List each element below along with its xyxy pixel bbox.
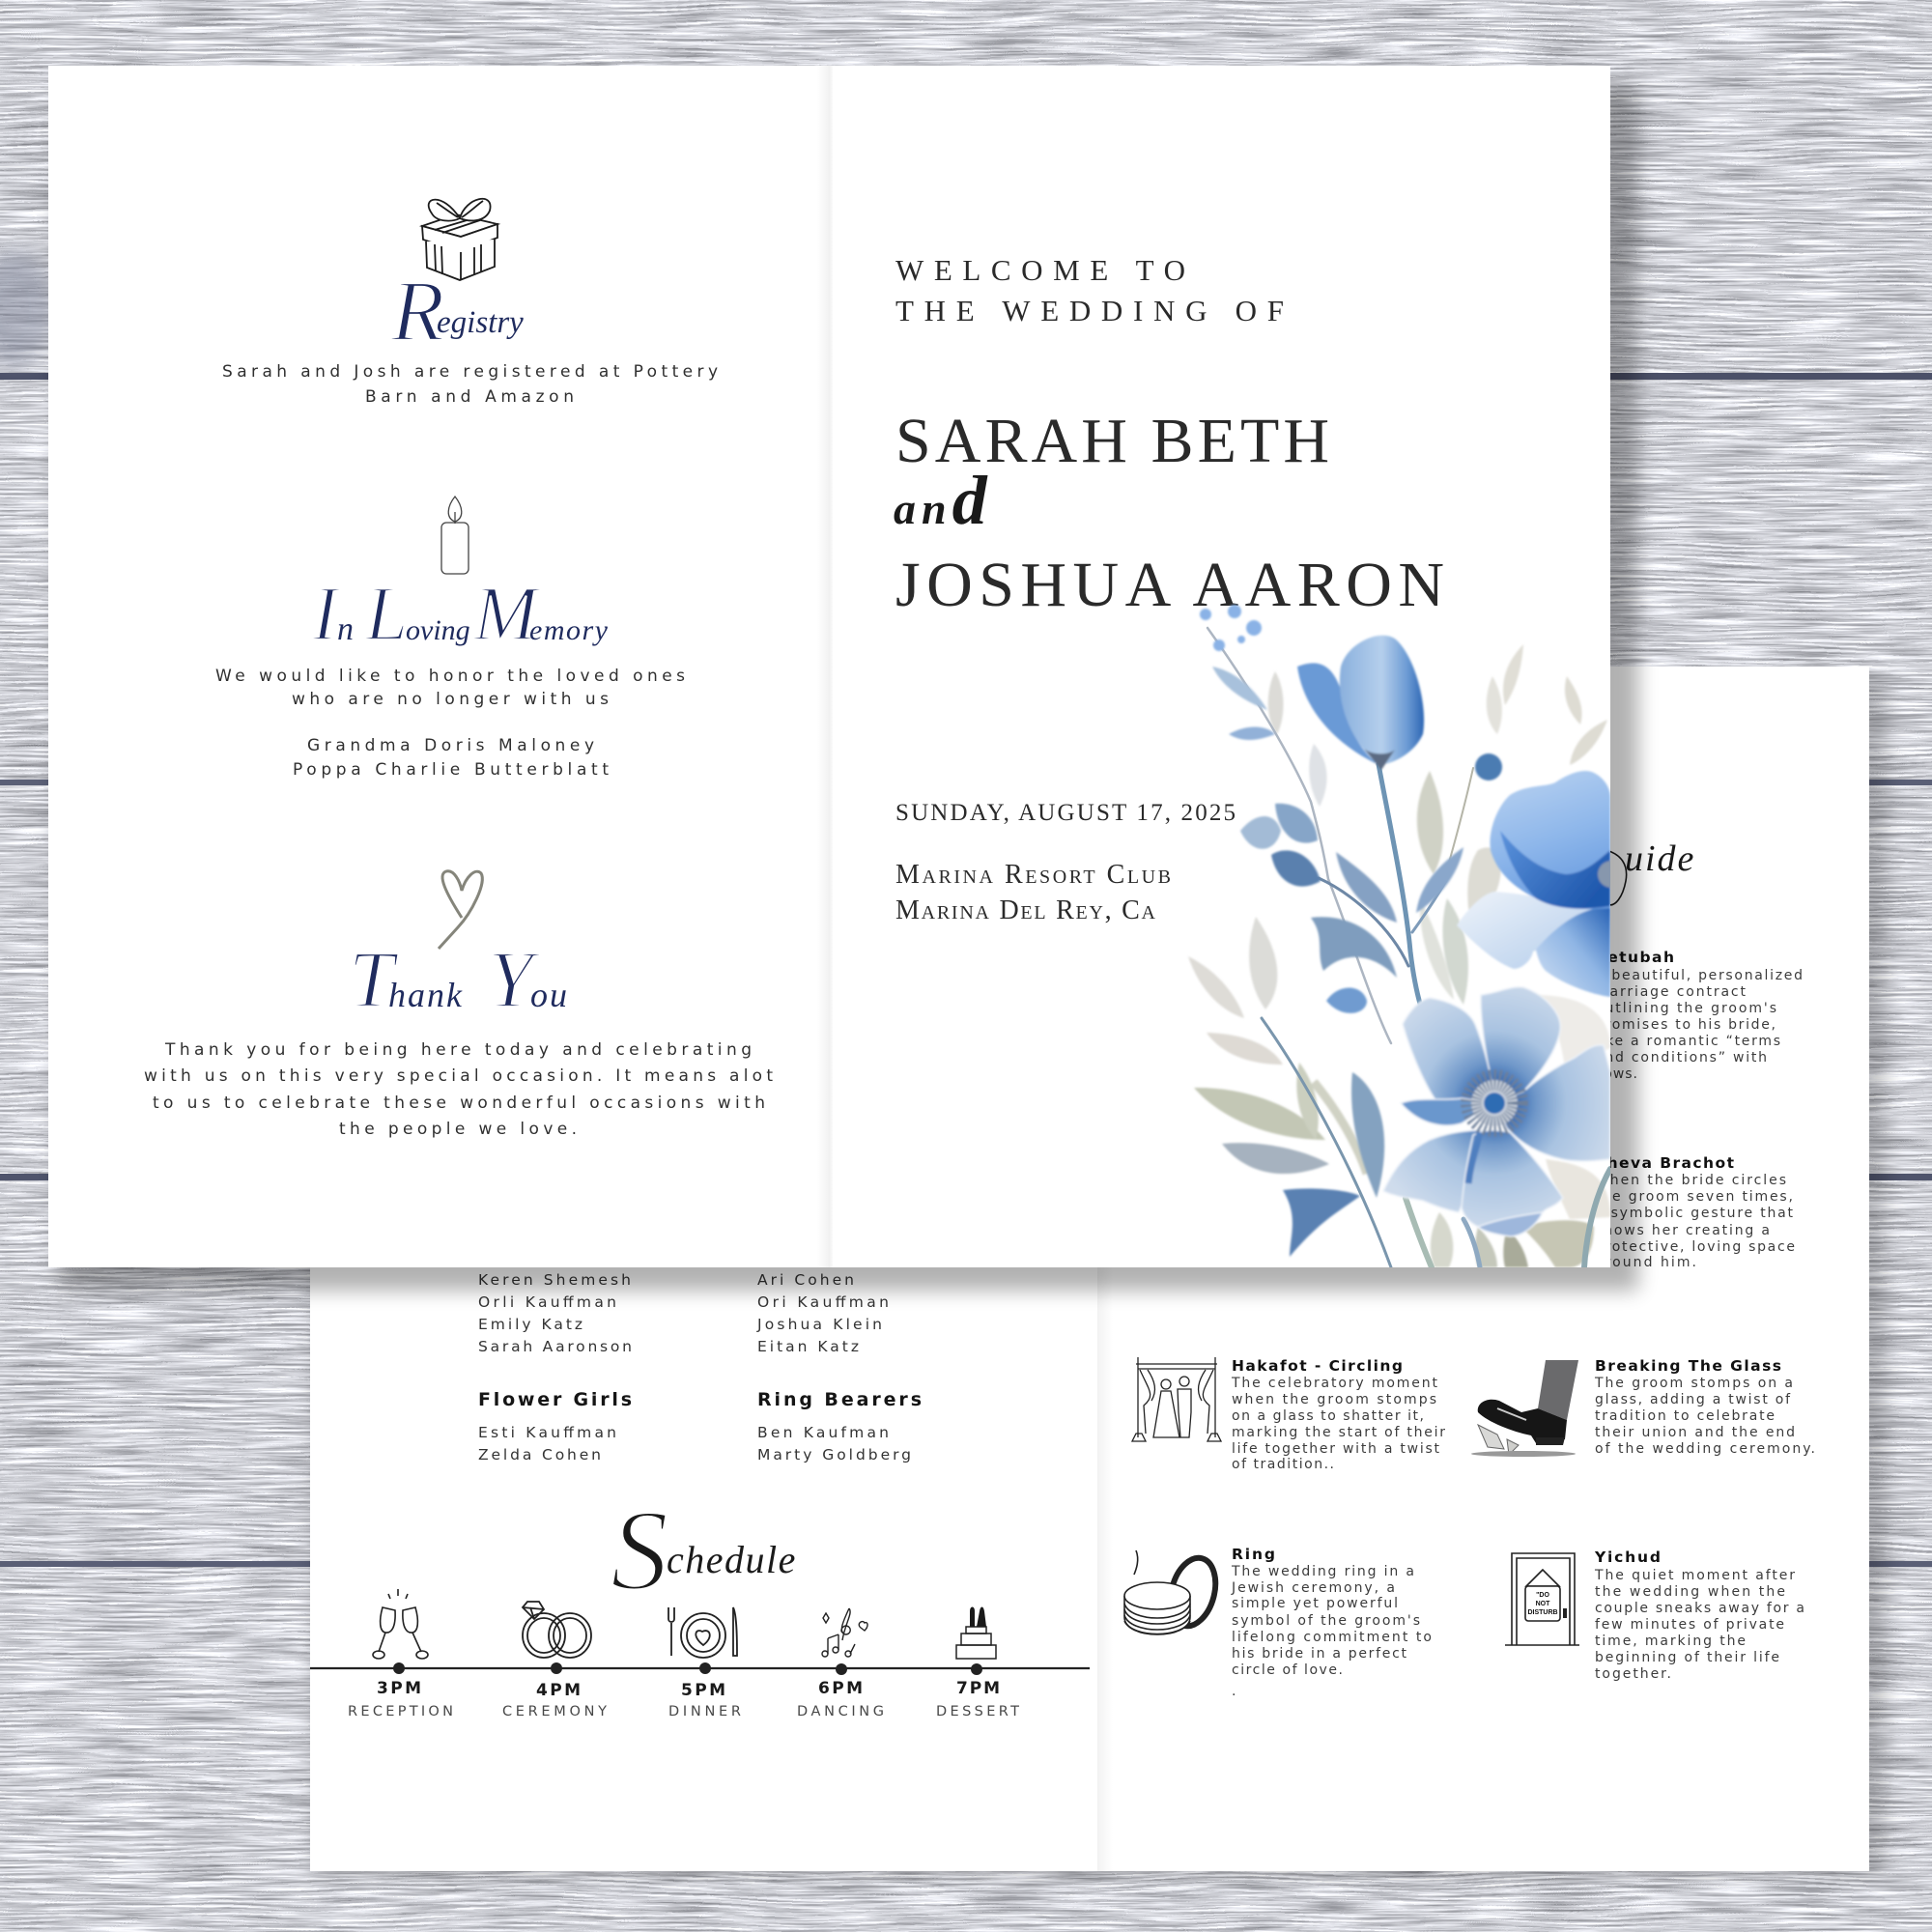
right flower, clipped by page edge bbox=[1457, 771, 1625, 997]
registry section: R bbox=[390, 264, 444, 359]
icon: gift box bbox=[422, 199, 497, 280]
icon: music notes bbox=[822, 1608, 867, 1657]
in loving memory section: We would like to honor the loved ones bbox=[215, 667, 685, 686]
icon: door with sign: DISTURB bbox=[1527, 1609, 1558, 1616]
guide item: ketubah: outlining the groom's bbox=[1595, 1001, 1776, 1016]
in loving memory section bbox=[215, 497, 685, 780]
icon: chuppah couple bbox=[1132, 1357, 1221, 1441]
flower girls: Zelda Cohen bbox=[478, 1446, 601, 1463]
in loving memory section: M bbox=[472, 572, 542, 657]
icon: door with sign: NOT bbox=[1536, 1601, 1550, 1607]
guide item: yichud: beginning of their life bbox=[1595, 1650, 1779, 1665]
schedule timeline bbox=[310, 1589, 1090, 1719]
guide item: sheva brachot: When the bride circles bbox=[1595, 1173, 1786, 1188]
guide item: ring: his bride in a perfect bbox=[1232, 1646, 1406, 1662]
7PM dessert bbox=[936, 1679, 1019, 1719]
guide item: ring: . bbox=[1232, 1684, 1236, 1699]
6PM dancing: DANCING bbox=[797, 1704, 884, 1719]
bridal party names: bridesmaids: Orli Kauffman bbox=[478, 1293, 616, 1311]
icon: heart bbox=[439, 871, 482, 949]
in loving memory section: oving bbox=[406, 614, 470, 646]
bridal party names: bridesmaids: Keren Shemesh bbox=[478, 1271, 631, 1289]
date and venue: Marina Del Rey, Ca bbox=[895, 895, 1156, 925]
thank you section: hank bbox=[388, 976, 464, 1014]
guide item: hakafot: Hakafot - Circling bbox=[1232, 1357, 1403, 1375]
guide item: ketubah: A beautiful, personalized bbox=[1595, 968, 1803, 983]
guide item: breaking the glass: glass, adding a twist of bbox=[1595, 1392, 1791, 1407]
schedule heading: chedule bbox=[667, 1538, 797, 1581]
icon: wedding cake bbox=[956, 1607, 996, 1659]
guide item: ring: symbol of the groom's bbox=[1232, 1613, 1420, 1629]
icon: door with sign bbox=[1505, 1553, 1579, 1645]
guide heading bbox=[1521, 794, 1695, 905]
bridal party names: bridesmaids bbox=[478, 1271, 632, 1355]
icon: candle bbox=[441, 497, 469, 574]
guide item: ring: Jewish ceremony, a bbox=[1231, 1580, 1395, 1596]
5PM dinner: DINNER bbox=[668, 1704, 741, 1719]
guide item: sheva brachot bbox=[1595, 1154, 1795, 1270]
bridal party names: bridesmaids: Emily Katz bbox=[478, 1316, 582, 1333]
4PM ceremony: CEREMONY bbox=[502, 1704, 607, 1719]
5PM dinner: 5PM bbox=[681, 1681, 725, 1700]
guide heading: G bbox=[1521, 794, 1584, 890]
couple names: JOSHUA AARON bbox=[895, 550, 1444, 620]
guide item: sheva brachot: the groom seven times, bbox=[1595, 1189, 1793, 1205]
bridal party names: groomsmen: Eitan Katz bbox=[757, 1338, 859, 1355]
in loving memory section: n bbox=[337, 611, 354, 647]
7PM dessert: 7PM bbox=[956, 1679, 1000, 1698]
guide item: ring: circle of love. bbox=[1232, 1662, 1343, 1678]
guide item: ring bbox=[1124, 1546, 1432, 1699]
3PM reception: 3PM bbox=[377, 1679, 421, 1698]
registry section: Barn and Amazon bbox=[365, 387, 574, 407]
thank you section: ou bbox=[530, 976, 569, 1014]
guide item: breaking the glass: The groom stomps on a bbox=[1594, 1376, 1793, 1391]
guide item: hakafot: life together with a twist bbox=[1232, 1441, 1439, 1457]
tulip flower bbox=[1297, 636, 1424, 770]
blue-gray leaves bbox=[1200, 605, 1502, 1257]
ring bearers: Ben Kaufman bbox=[757, 1424, 889, 1441]
guide item: ring: lifelong commitment to bbox=[1232, 1630, 1432, 1645]
guide item: breaking the glass: of the wedding ceremony. bbox=[1595, 1441, 1815, 1457]
guide item: sheva brachot: around him. bbox=[1595, 1255, 1696, 1270]
guide item: yichud bbox=[1505, 1548, 1804, 1682]
icon: dinner plate bbox=[668, 1607, 737, 1658]
guide item: yichud: few minutes of private bbox=[1595, 1617, 1784, 1633]
4PM ceremony bbox=[502, 1681, 607, 1719]
welcome heading: WELCOME TO bbox=[895, 253, 1185, 287]
thank you section: the people we love. bbox=[339, 1120, 577, 1139]
guide item: ketubah: like a romantic “terms bbox=[1595, 1034, 1780, 1049]
ring bearers: Ring Bearers bbox=[757, 1389, 922, 1410]
guide item: hakafot: The celebratory moment bbox=[1231, 1376, 1437, 1391]
guide item: hakafot: when the groom stomps bbox=[1232, 1392, 1436, 1407]
welcome heading bbox=[895, 253, 1284, 327]
flower girls: Esti Kauffman bbox=[478, 1424, 616, 1441]
ring bearers bbox=[757, 1389, 922, 1463]
in loving memory section: emory bbox=[529, 614, 609, 646]
couple names: and bbox=[894, 462, 988, 539]
bottom flower with stamen center bbox=[1383, 987, 1610, 1236]
panel: front cover spread bbox=[48, 66, 1638, 1291]
couple names: SARAH BETH bbox=[895, 406, 1329, 476]
in loving memory section: Poppa Charlie Butterblatt bbox=[293, 760, 609, 780]
guide item: breaking the glass: Breaking The Glass bbox=[1595, 1357, 1781, 1375]
bridal party names: groomsmen: Ari Cohen bbox=[757, 1271, 854, 1289]
watercolor blue floral bouquet bbox=[1188, 605, 1625, 1267]
guide item: sheva brachot: Sheva Brachot bbox=[1595, 1154, 1735, 1172]
guide item: ketubah: promises to his bride, bbox=[1595, 1017, 1776, 1033]
guide heading: uide bbox=[1625, 838, 1695, 879]
bridal party names: groomsmen: Ori Kauffman bbox=[757, 1293, 889, 1311]
icon: door with sign: "DO bbox=[1536, 1592, 1549, 1599]
3PM reception: RECEPTION bbox=[348, 1704, 453, 1719]
guide item: yichud: together. bbox=[1595, 1666, 1671, 1682]
in loving memory section: I bbox=[311, 572, 341, 657]
guide item: ring: simple yet powerful bbox=[1232, 1596, 1398, 1611]
stems bbox=[1208, 628, 1610, 1267]
guide item: sheva brachot: shows her creating a bbox=[1595, 1223, 1770, 1238]
schedule heading: S bbox=[611, 1486, 668, 1614]
guide item: hakafot: on a glass to shatter it, bbox=[1232, 1408, 1424, 1424]
bridal party names: groomsmen: Joshua Klein bbox=[756, 1316, 882, 1333]
guide item: yichud: The quiet moment after bbox=[1594, 1568, 1795, 1583]
guide item: breaking the glass: tradition to celebrate bbox=[1595, 1408, 1775, 1424]
guide item: ketubah bbox=[1595, 949, 1803, 1082]
7PM dessert: DESSERT bbox=[936, 1704, 1019, 1719]
thank you section: Thank you for being here today and celebrating bbox=[164, 1040, 752, 1060]
bridal party names: groomsmen bbox=[756, 1271, 889, 1355]
thank you section: T bbox=[349, 935, 399, 1025]
ring bearers: Marty Goldberg bbox=[757, 1446, 911, 1463]
thank you section: to us to celebrate these wonderful occasions with bbox=[153, 1094, 765, 1113]
in loving memory section: L bbox=[364, 572, 408, 657]
guide item: hakafot: marking the start of their bbox=[1232, 1425, 1445, 1440]
icon: rings bbox=[1124, 1550, 1223, 1634]
guide item: hakafot: of tradition.. bbox=[1232, 1457, 1334, 1472]
registry section bbox=[222, 199, 718, 407]
date and venue: Marina Resort Club bbox=[895, 860, 1171, 890]
icon: shoe on glass bbox=[1471, 1360, 1578, 1457]
thank you section: with us on this very special occasion. It means alot bbox=[144, 1066, 773, 1086]
couple names bbox=[894, 406, 1444, 620]
flower girls bbox=[478, 1389, 632, 1463]
registry section: Sarah and Josh are registered at Pottery bbox=[222, 362, 718, 382]
guide item: yichud: Yichud bbox=[1594, 1548, 1661, 1566]
guide item: ketubah: Ketubah bbox=[1595, 949, 1674, 966]
5PM dinner bbox=[668, 1681, 741, 1719]
icon: champagne glasses bbox=[373, 1589, 428, 1659]
guide item: breaking the glass: their union and the end bbox=[1595, 1425, 1795, 1440]
guide item: yichud: couple sneaks away for a bbox=[1595, 1601, 1804, 1616]
guide item: hakafot bbox=[1132, 1357, 1445, 1472]
date and venue bbox=[895, 800, 1236, 925]
welcome heading: THE WEDDING OF bbox=[895, 294, 1284, 327]
in loving memory section: who are no longer with us bbox=[292, 690, 609, 709]
bridal party names: bridesmaids: Sarah Aaronson bbox=[478, 1338, 632, 1355]
registry section: egistry bbox=[437, 305, 524, 340]
guide item: breaking the glass bbox=[1471, 1357, 1815, 1457]
6PM dancing: 6PM bbox=[818, 1679, 863, 1698]
panel: back inside spread bbox=[310, 667, 1887, 1876]
thank you section bbox=[144, 871, 773, 1139]
guide item: ketubah: and conditions” with bbox=[1595, 1050, 1767, 1065]
guide item: ring: The wedding ring in a bbox=[1231, 1564, 1414, 1579]
guide item: yichud: the wedding when the bbox=[1595, 1584, 1785, 1600]
3PM reception bbox=[348, 1679, 453, 1719]
thank you section: Y bbox=[488, 935, 541, 1025]
guide item: sheva brachot: protective, loving space bbox=[1595, 1239, 1795, 1255]
date and venue: SUNDAY, AUGUST 17, 2025 bbox=[895, 800, 1236, 826]
guide item: sheva brachot: a symbolic gesture that bbox=[1595, 1206, 1793, 1221]
6PM dancing bbox=[797, 1679, 884, 1719]
beige and sage background leaves bbox=[1188, 644, 1610, 1267]
guide item: yichud: time, marking the bbox=[1595, 1634, 1746, 1649]
icon: wedding rings bbox=[523, 1602, 591, 1658]
flower girls: Flower Girls bbox=[478, 1389, 632, 1410]
in loving memory section: Grandma Doris Maloney bbox=[307, 736, 594, 755]
guide item: ketubah: marriage contract bbox=[1595, 984, 1747, 1000]
guide item: ring: Ring bbox=[1232, 1546, 1275, 1563]
4PM ceremony: 4PM bbox=[536, 1681, 581, 1700]
guide item: ketubah: vows. bbox=[1595, 1066, 1637, 1082]
